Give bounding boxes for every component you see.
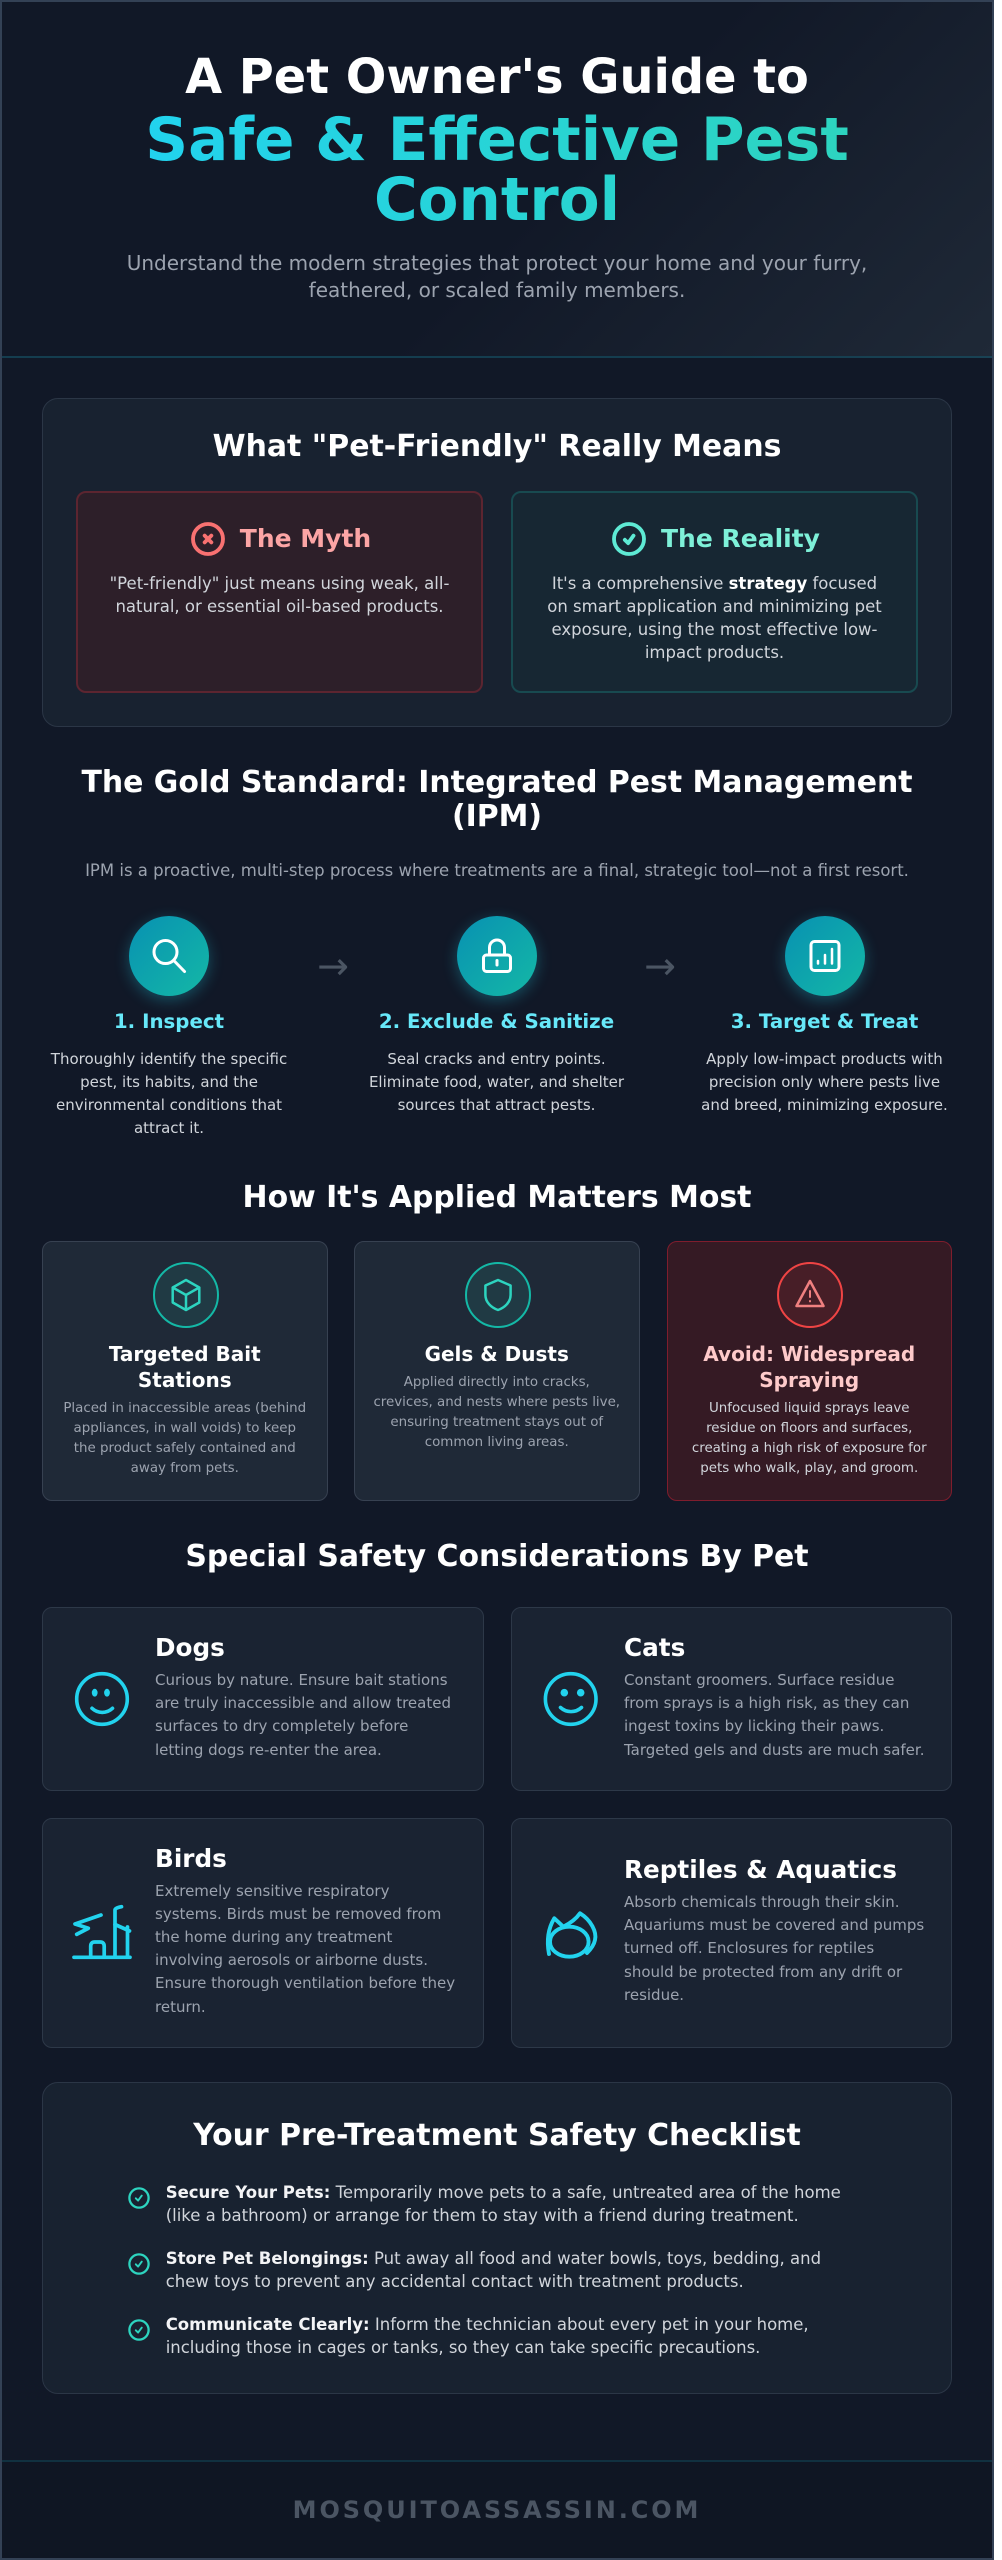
pet text [155,1671,451,1759]
title highlight [145,106,849,234]
step text: Eliminate food, water, and shelter [369,1073,624,1091]
step text: sources that attract pests. [398,1096,595,1114]
reality text: impact products. [645,643,784,662]
icon: check [128,2253,150,2275]
card: gels and dusts [354,1241,640,1501]
pet text: Absorb chemicals through their skin. [624,1893,900,1911]
item text: chew toys to prevent any accidental contact with treatment products. [166,2272,744,2291]
card text: Unfocused liquid sprays leave [709,1401,910,1416]
reality header [612,522,820,556]
card title [108,1342,261,1392]
pet text: surfaces to dry completely before [155,1717,408,1735]
pet text [624,1671,924,1759]
icon: check [128,2187,150,2209]
icon: chart [784,916,864,996]
icon: magnifier [129,916,209,996]
pet title: Dogs [155,1633,225,1662]
reality text: It's a comprehensive strategy focused [552,574,877,592]
item text [166,2313,809,2360]
pet text: Curious by nature. Ensure bait stations [155,1671,448,1689]
title line: A Pet Owner's Guide to [185,50,809,105]
card text: Applied directly into cracks, [404,1375,590,1390]
pet title: Cats [624,1633,685,1662]
card text: the product safely contained and [74,1441,296,1456]
step text: and breed, minimizing exposure. [701,1096,948,1114]
panel: checklist [42,2082,952,2394]
footer [0,2460,994,2560]
step title: 3. Target & Treat [731,1010,918,1033]
step text [50,1050,287,1137]
reality text: on smart application and minimizing pet [547,597,882,616]
myth text: natural, or essential oil-based products. [115,597,444,616]
step text: pest, its habits, and the [80,1073,258,1091]
heading: gold standard: The Gold Standard: Integrated Pest Management [81,765,913,800]
pet text: turned off. Enclosures for reptiles [624,1939,874,1957]
step title: 2. Exclude & Sanitize [379,1010,614,1033]
item text [166,2183,841,2225]
card text: Placed in inaccessible areas (behind [63,1401,306,1416]
item text: Store Pet Belongings: Put away all food and water bowls, toys, bedding, and [166,2249,821,2268]
icon: x circle [191,522,225,556]
myth text: "Pet-friendly" just means using weak, all- [110,574,449,592]
pet text: residue. [624,1986,684,2004]
step text [701,1050,948,1114]
checklist item 2 [128,2249,821,2291]
icon: reptile [546,1911,598,1959]
pet text [624,1893,924,2004]
arrow: → [317,944,349,988]
pet title: Birds [155,1844,227,1873]
heading: gold standard [81,765,913,834]
myth header [191,522,371,556]
card text: crevices, and nests where pests live, [373,1395,620,1410]
pet text: involving aerosols or airborne dusts. [155,1951,428,1969]
step 3: target [701,913,948,1114]
card title: Avoid: Widespread [703,1342,915,1366]
reality text: exposure, using the most effective low- [551,620,878,639]
card text: creating a high risk of exposure for [692,1441,927,1456]
pet card: dogs [42,1607,484,1791]
card text: ensuring treatment stays out of [390,1415,603,1430]
pet text: ingest toxins by licking their paws. [624,1717,884,1735]
pet text: Extremely sensitive respiratory [155,1882,389,1900]
pet text: letting dogs re-enter the area. [155,1741,382,1759]
pet card: birds [42,1818,484,2048]
subtitle: Understand the modern strategies that protect your home and your furry, [127,250,867,274]
card text: pets who walk, play, and groom. [700,1461,918,1476]
pet text: return. [155,1998,206,2016]
icon: cube [153,1262,219,1328]
reality text [547,574,882,662]
card title: Stations [138,1368,232,1392]
pet text: systems. Birds must be removed from [155,1905,441,1923]
checklist item 3 [128,2315,809,2357]
myth text [110,574,449,616]
myth label: The Myth [240,524,371,553]
icon: cat face [544,1672,598,1726]
step text: precision only where pests live [709,1073,940,1091]
icon: bird house [72,1904,132,1960]
pet text: Aquariums must be covered and pumps [624,1916,924,1934]
subtitle: feathered, or scaled family members. [309,278,685,302]
item text: Secure Your Pets: Temporarily move pets to a safe, untreated area of the home [166,2183,841,2202]
item text: (like a bathroom) or arrange for them to stay with a friend during treatment. [166,2206,799,2225]
pet text: from sprays is a high risk, as they can [624,1694,909,1712]
pet text: the home during any treatment [155,1928,392,1946]
step text: Apply low-impact products with [706,1050,943,1068]
title [145,50,849,234]
title highlight: Safe & Effective Pest [145,106,849,174]
reality card [511,491,918,693]
card text: residue on floors and surfaces, [706,1421,912,1436]
heading: Your Pre-Treatment Safety Checklist [193,2118,801,2153]
card title: Targeted Bait [109,1342,261,1366]
card title [703,1342,915,1392]
pet title: Reptiles & Aquatics [624,1855,897,1884]
step text [369,1050,624,1114]
pet text: should be protected from any drift or [624,1963,902,1981]
heading: gold standard: (IPM) [452,799,542,834]
icon: check [128,2319,150,2341]
pet text: Constant groomers. Surface residue [624,1671,894,1689]
IPM description: IPM is a proactive, multi-step process where treatments are a final, strategic tool—not a first resort. [85,861,909,880]
item text: Communicate Clearly: Inform the technician about every pet in your home, [166,2315,809,2334]
heading: how it's applied: How It's Applied Matters Most [243,1180,751,1215]
card text [63,1401,306,1476]
card text [692,1401,927,1476]
step title: 1. Inspect [114,1010,224,1033]
subtitle [127,250,867,302]
myth card [76,491,483,693]
title highlight: Control [374,166,620,234]
card title: Gels & Dusts [425,1342,569,1366]
step text: attract it. [134,1119,204,1137]
footer brand: MOSQUITOASSASSIN.COM [293,2496,701,2524]
icon: dog face [74,1672,130,1726]
icon: shield [465,1262,531,1328]
icon: warning [777,1262,843,1328]
arrow: → [644,944,676,988]
card title: Spraying [759,1368,859,1392]
pet text: Targeted gels and dusts are much safer. [624,1741,924,1759]
card: targeted bait stations [42,1241,328,1501]
step text: environmental conditions that [56,1096,282,1114]
heading: special safety: Special Safety Considerations By Pet [185,1539,809,1574]
reality label: The Reality [661,524,820,553]
card text: common living areas. [425,1435,569,1450]
step text: Thoroughly identify the specific [51,1050,287,1068]
checklist item 1 [128,2183,841,2225]
pet text: Ensure thorough ventilation before they [155,1974,455,1992]
card text [373,1375,620,1450]
icon: check circle [612,522,646,556]
item text: including those in cages or tanks, so they can take specific precautions. [166,2338,760,2357]
step 2: exclude [369,913,624,1114]
step text: Seal cracks and entry points. [387,1050,606,1068]
panel: what pet-friendly means [42,398,952,727]
step 1: inspect [50,913,287,1137]
header [0,0,994,358]
card text: appliances, in wall voids) to keep [74,1421,296,1436]
card: avoid widespread spraying [666,1241,952,1501]
icon: lock [456,916,536,996]
card text: away from pets. [131,1461,239,1476]
pet text [155,1882,455,2016]
pet card: cats [510,1607,952,1791]
heading: What "Pet-Friendly" Really Means [213,429,781,464]
item text [166,2249,821,2291]
pet text: are truly inaccessible and allow treated [155,1694,451,1712]
pet card: reptiles and aquatics [510,1818,952,2048]
